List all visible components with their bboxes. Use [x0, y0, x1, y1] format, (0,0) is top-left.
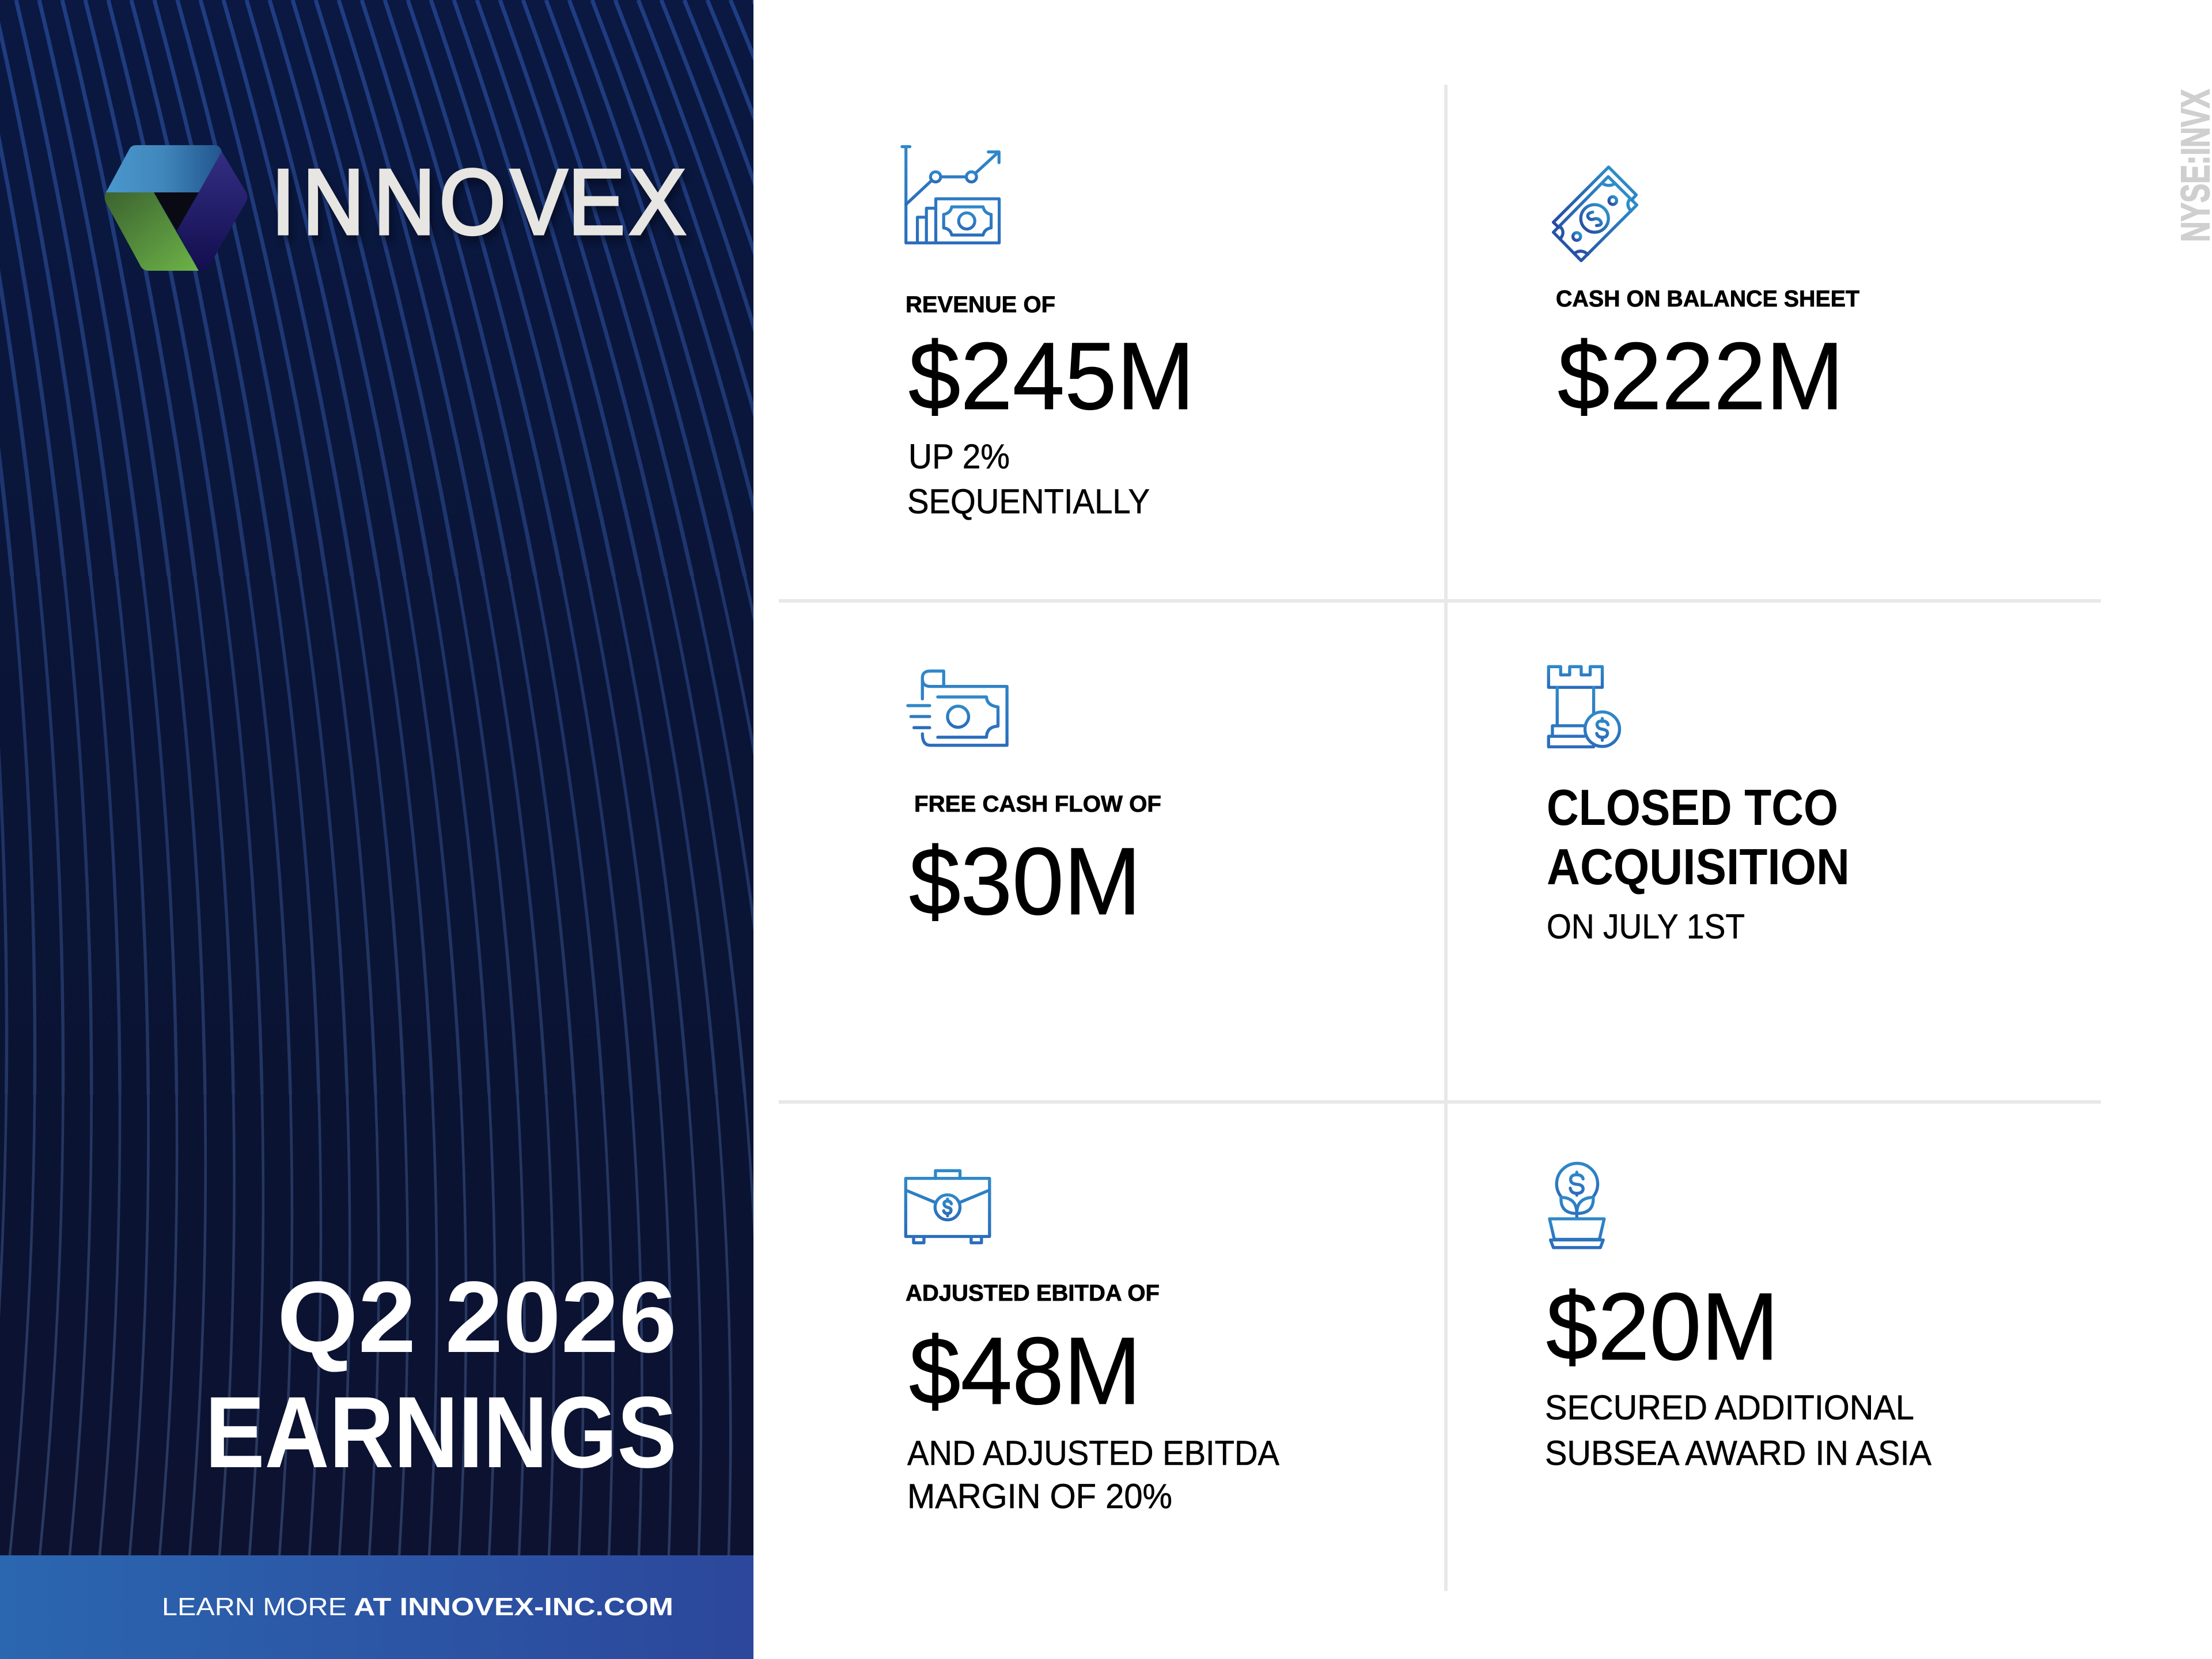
logo: Innovex hexagon mark	[105, 145, 248, 271]
icon: banknotes	[1554, 167, 1637, 260]
value: $30M	[909, 828, 1141, 935]
note: MARGIN OF 20%	[907, 1477, 1172, 1516]
icon: briefcase	[906, 1171, 990, 1243]
panel: left dark background	[0, 0, 753, 1555]
note: AND ADJUSTED EBITDA	[907, 1434, 1279, 1472]
icon: chart and banknote	[902, 147, 999, 243]
footer bar: learn more	[0, 1555, 753, 1659]
panel: revenue	[902, 147, 1195, 521]
icon: money plant	[1550, 1164, 1604, 1248]
note: SEQUENTIALLY	[907, 482, 1150, 521]
heading: ACQUISITION	[1547, 838, 1850, 895]
label: CASH ON BALANCE SHEET	[1556, 286, 1859, 312]
logo mark: purple face	[177, 151, 248, 271]
panel: cash on balance sheet	[1554, 167, 1859, 430]
logo mark: dark centre	[154, 192, 199, 230]
icon: rook with coin	[1548, 666, 1620, 747]
panel: free cash flow	[908, 671, 1161, 935]
heading: Q2 2026 Earnings	[205, 1261, 677, 1489]
logo mark: green face	[105, 192, 199, 271]
note: ON JULY 1ST	[1547, 907, 1745, 946]
icon: cash flow banknote	[908, 671, 1007, 745]
value: $222M	[1558, 323, 1844, 430]
label: REVENUE OF	[906, 292, 1055, 317]
footer bar: learn more: AT INNOVEX-INC.COM	[354, 1593, 673, 1621]
note	[1545, 1388, 1931, 1472]
note: SUBSEA AWARD IN ASIA	[1545, 1434, 1931, 1472]
heading: Q2 2026 Earnings: EARNINGS	[205, 1376, 677, 1489]
heading	[1547, 779, 1850, 895]
note	[907, 1434, 1279, 1516]
heading: CLOSED TCO	[1547, 779, 1838, 836]
logo mark: blue face	[106, 145, 222, 192]
value: $20M	[1546, 1274, 1779, 1380]
value: $245M	[908, 323, 1195, 430]
label: FREE CASH FLOW OF	[914, 791, 1161, 817]
note	[907, 437, 1150, 521]
value: $48M	[909, 1318, 1141, 1425]
note: UP 2%	[908, 437, 1010, 476]
panel: adjusted EBITDA	[906, 1171, 1279, 1516]
panel: subsea award	[1545, 1164, 1931, 1472]
note: SECURED ADDITIONAL	[1545, 1388, 1914, 1427]
grid dividers	[779, 85, 2101, 1591]
label: ADJUSTED EBITDA OF	[906, 1281, 1160, 1306]
logo wordmark: INNOVEX	[271, 150, 686, 253]
panel: TCO acquisition	[1547, 666, 1850, 946]
heading: Q2 2026 Earnings: Q2 2026	[277, 1261, 677, 1374]
footer bar: learn more: LEARN MORE	[162, 1593, 347, 1621]
